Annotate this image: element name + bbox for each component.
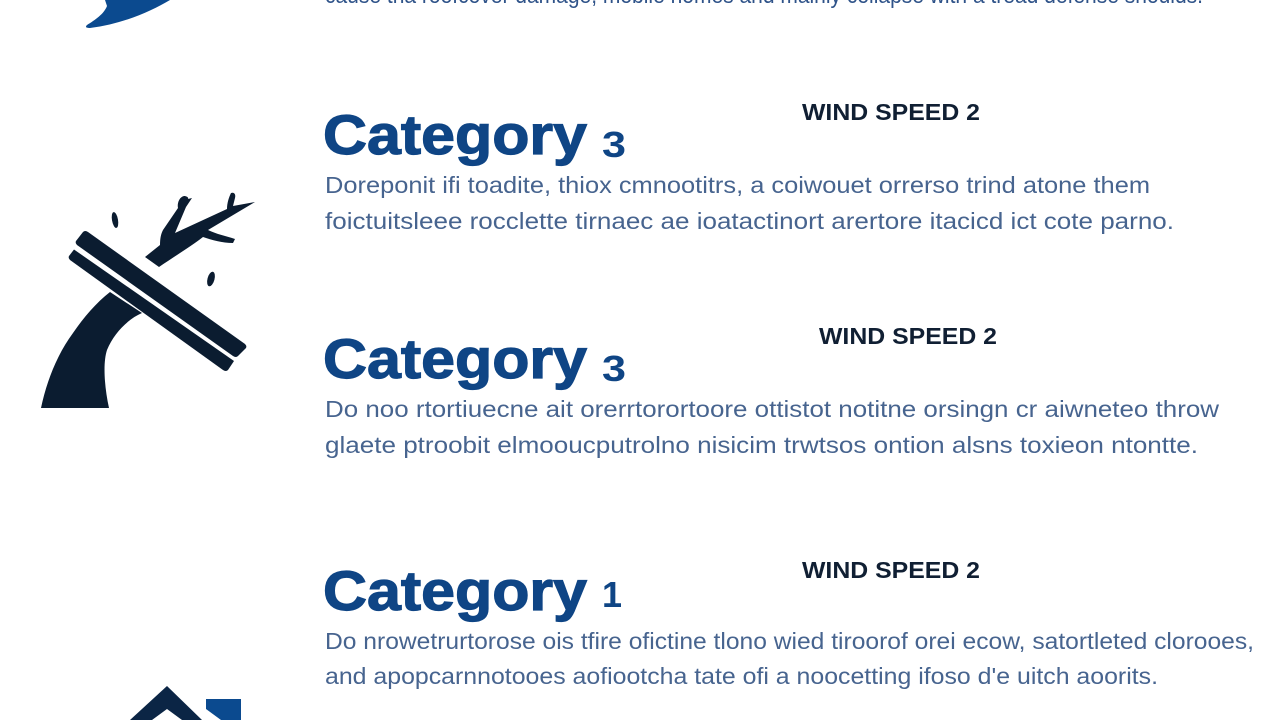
label: wind speed: WIND SPEED 2: [802, 557, 980, 583]
heading: Category 1: Category: [323, 559, 587, 622]
tree trunk: [41, 292, 142, 408]
label: wind speed: WIND SPEED 2: [802, 99, 980, 125]
section: second Category 3: [323, 323, 1219, 458]
fallen beam lower: [69, 250, 234, 371]
text: description: and apopcarnnotooes aofiootcha tate ofi a noocetting ifoso d'e uitch aoorits.: [325, 663, 1158, 689]
chimney: [206, 699, 241, 720]
heading: Category 1: 1: [602, 574, 622, 615]
icon: fallen tree across a road: [41, 193, 255, 408]
text: description: [325, 628, 1254, 689]
heading: Category 3: Category: [323, 327, 587, 390]
heading: Category 3: 3: [602, 348, 626, 389]
text: description: glaete ptroobit elmooucputrolno nisicim trwtsos ontion alsns toxieon ntontte.: [325, 432, 1198, 458]
label: wind speed: WIND SPEED 2: [819, 323, 997, 349]
heading: Category 3: Category: [323, 103, 587, 166]
text: description: Do nrowetrurtorose ois tfire ofictine tlono wied tiroorof orei ecow, satortleted clorooes,: [325, 628, 1254, 654]
debris right: [206, 271, 216, 287]
fallen beam upper: [76, 231, 246, 357]
icon: house roof, cropped at bottom: [130, 686, 241, 720]
text: description: [325, 396, 1219, 458]
broken branch: [145, 193, 255, 267]
text: description: foictuitsleee rocclette tirnaec ae ioatactinort arertore itacicd ict cote parno.: [325, 208, 1174, 234]
text: description: Do noo rtortiuecne ait orerrtorortoore ottistot notitne orsingn cr aiwneteo throw: [325, 396, 1219, 422]
text: description: Doreponit ifi toadite, thiox cmnootitrs, a coiwouet orrerso trind atone them: [325, 172, 1150, 198]
section: first Category 3: [323, 99, 1174, 234]
roof: [130, 686, 202, 720]
icon: wind swoosh, cropped at top: [86, 0, 170, 28]
heading: Category 3: 3: [602, 124, 626, 165]
debris left: [111, 212, 119, 228]
section: Category 1: [323, 557, 1254, 689]
text: description: [325, 172, 1174, 234]
